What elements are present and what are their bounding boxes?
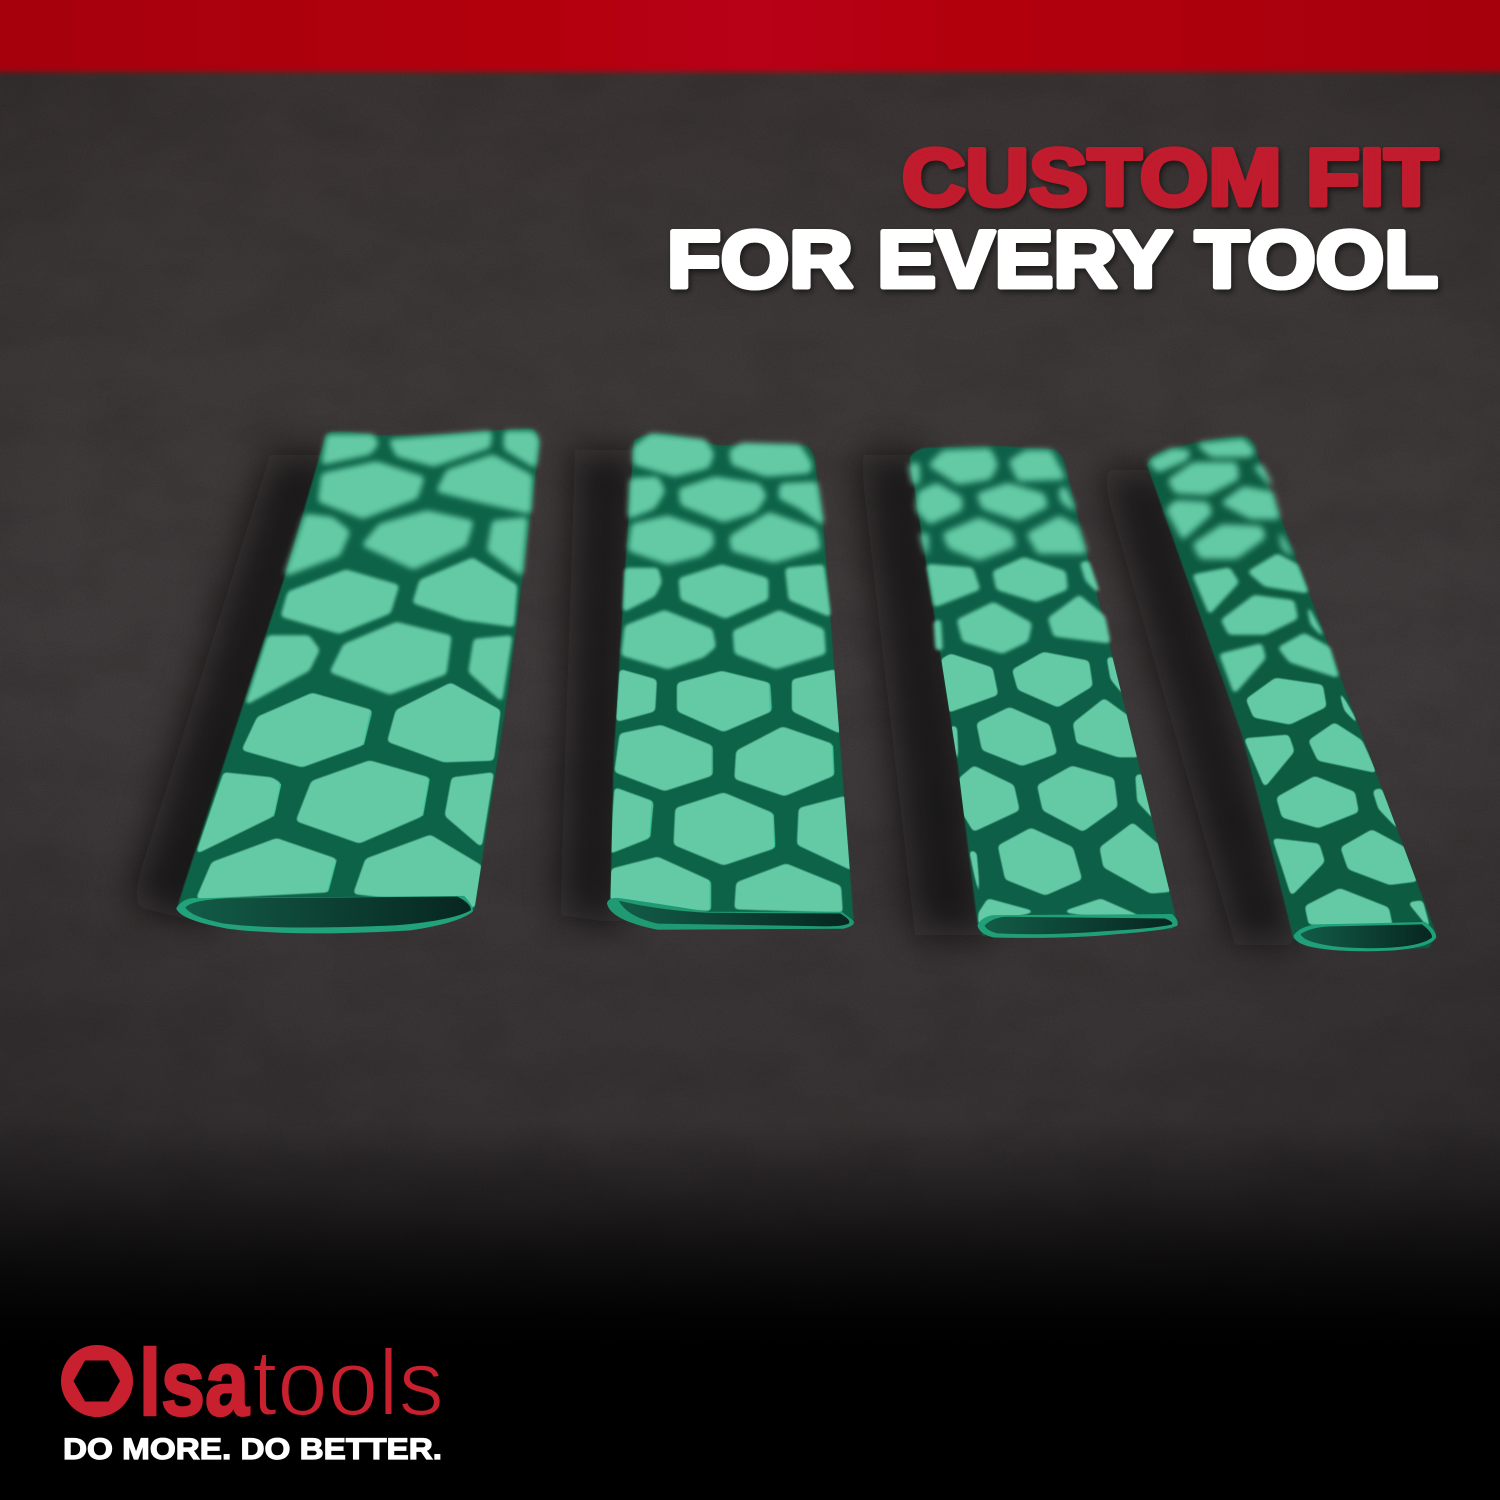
- icon: logo O with hexagon hole: [61, 1345, 133, 1417]
- sleeve 1 opening: [176, 896, 473, 933]
- heading line 2: for every tool: FOR EVERY TOOL: [667, 215, 1438, 305]
- sleeve shadows: [130, 450, 1300, 945]
- red top band: [0, 0, 1500, 72]
- sleeve 2: medium-wide wrap: [607, 434, 854, 930]
- heading: [667, 133, 1438, 305]
- logo wordmark light part: tools: [252, 1330, 444, 1435]
- tagline: DO MORE. DO BETTER.: [63, 1433, 442, 1466]
- sleeve 3: medium-narrow wrap: [910, 446, 1178, 938]
- sleeve 1: widest heat-shrink wrap: [176, 428, 539, 933]
- sleeve 2 opening: [607, 898, 854, 930]
- sleeve 4: narrowest wrap: [1147, 437, 1436, 951]
- heading line 1: custom fit: CUSTOM FIT: [902, 133, 1438, 223]
- logo: Olsatools with tagline: [61, 1330, 444, 1466]
- bottom fade to black: [0, 1120, 1500, 1500]
- logo wordmark bold part: lsa: [139, 1330, 250, 1435]
- sleeve 3 opening: [977, 914, 1178, 938]
- sleeve 4 opening: [1293, 922, 1436, 951]
